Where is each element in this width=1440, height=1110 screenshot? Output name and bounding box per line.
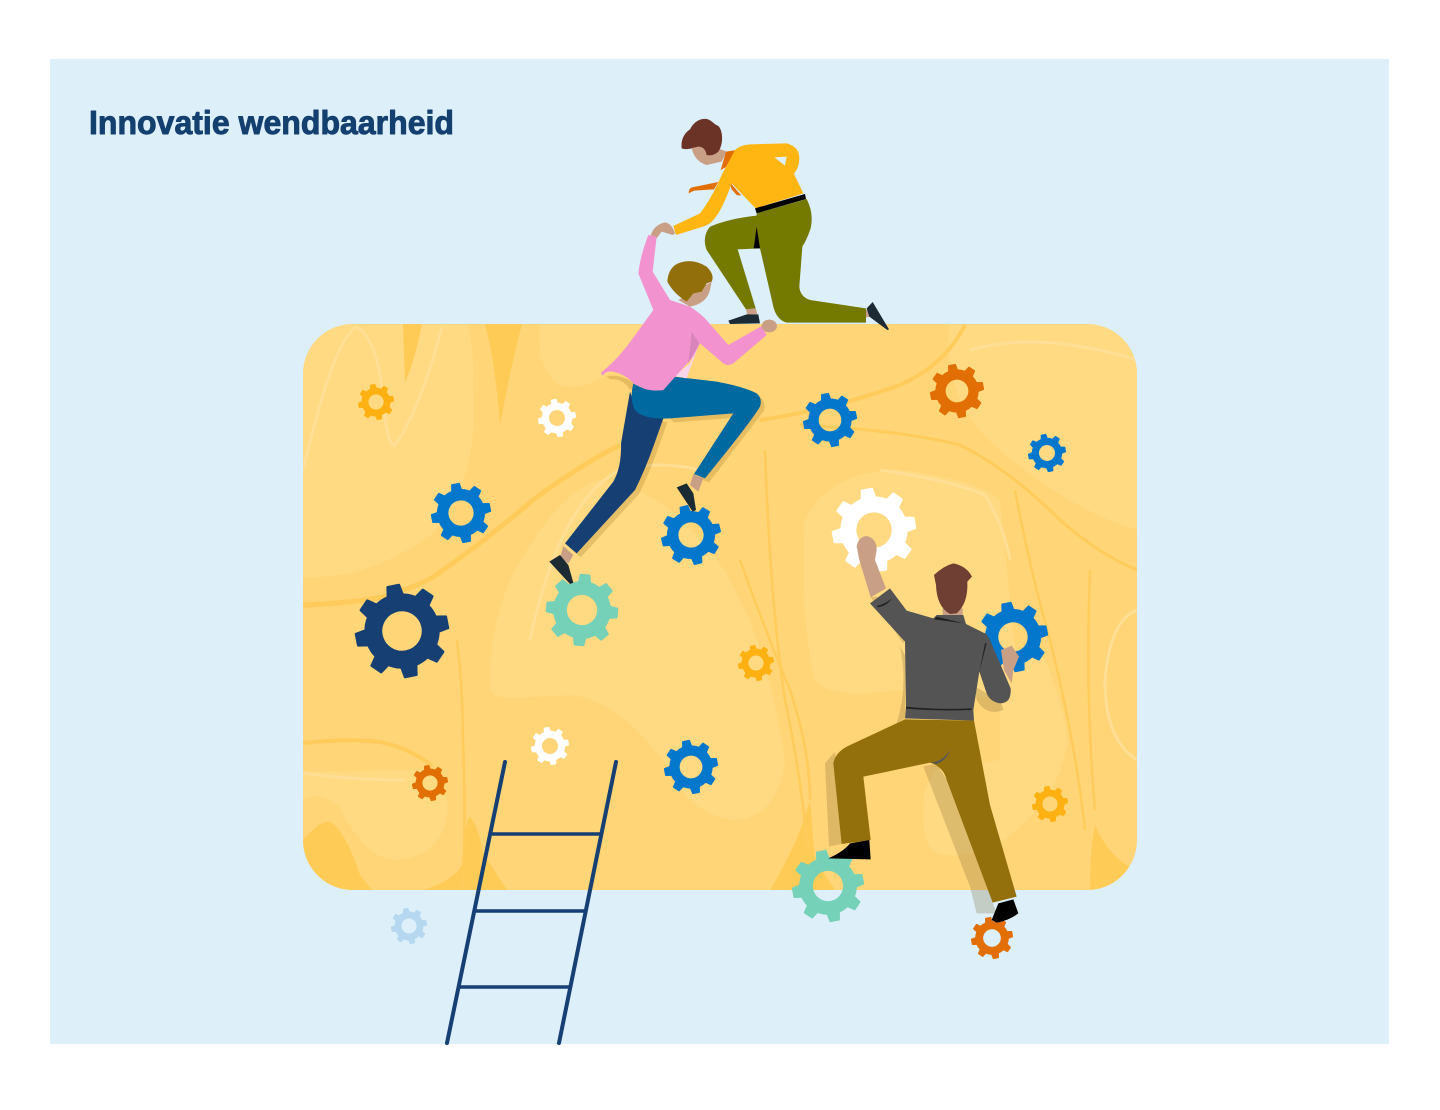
face — [692, 143, 727, 165]
gap between arm and body — [774, 157, 787, 166]
belt — [755, 194, 806, 213]
trousers — [705, 199, 866, 323]
hair — [934, 563, 972, 614]
hand on wall — [762, 320, 777, 332]
shoes — [728, 302, 889, 330]
gear: blue small right — [1025, 431, 1069, 475]
blouse — [674, 343, 699, 378]
gear: navy large — [347, 576, 457, 686]
shoes — [828, 840, 1018, 923]
ankles — [560, 474, 703, 563]
trousers — [833, 719, 1017, 903]
gear: white near ladder — [528, 724, 572, 768]
back leg — [565, 392, 663, 553]
hair — [667, 261, 713, 302]
tie — [689, 150, 741, 196]
gear: pale blue below wall — [388, 905, 430, 947]
gear: teal at wall bottom — [786, 844, 870, 928]
shirt — [870, 588, 1011, 721]
lower hand — [1001, 646, 1019, 683]
figure: man in grey shirt climbing, seen from behind — [825, 536, 1019, 923]
front leg — [632, 377, 761, 478]
shoes — [549, 483, 696, 584]
hair — [681, 119, 722, 155]
hand clasp — [651, 222, 675, 238]
trouser fold — [754, 227, 760, 248]
gear: yellow centre — [735, 642, 777, 684]
gear: orange below wall — [967, 913, 1017, 963]
neck — [943, 608, 963, 616]
shadows — [825, 597, 1003, 913]
gear: yellow lower right — [1029, 783, 1071, 825]
gear: orange top right — [925, 359, 989, 423]
panel: yellow wall with marbled texture — [303, 324, 1137, 890]
title: Innovatie wendbaarheid — [89, 104, 454, 141]
figure: woman in pink jacket climbing — [549, 235, 777, 584]
gear: white large — [825, 481, 923, 579]
jacket fold — [688, 332, 699, 363]
ladder — [447, 762, 616, 1043]
shirt folds — [877, 598, 987, 710]
gear: orange lower left — [409, 762, 451, 804]
gear: blue held by climber — [972, 596, 1054, 678]
gear: teal under woman's foot — [543, 571, 621, 649]
trouser crease — [930, 749, 951, 764]
gear: blue lower centre — [659, 735, 723, 799]
raised arm — [857, 536, 886, 597]
leg shadows — [569, 376, 764, 557]
ankles — [746, 308, 871, 317]
gear: yellow top left — [355, 381, 397, 423]
gear: blue top centre — [798, 388, 862, 452]
gear: blue left — [426, 478, 496, 548]
gear: blue under woman's foot — [655, 499, 727, 571]
jacket — [601, 235, 767, 391]
shirt — [673, 143, 803, 235]
figure: man in yellow shirt kneeling on top of wall — [651, 119, 889, 330]
face — [678, 282, 712, 307]
gear: white top — [535, 396, 579, 440]
